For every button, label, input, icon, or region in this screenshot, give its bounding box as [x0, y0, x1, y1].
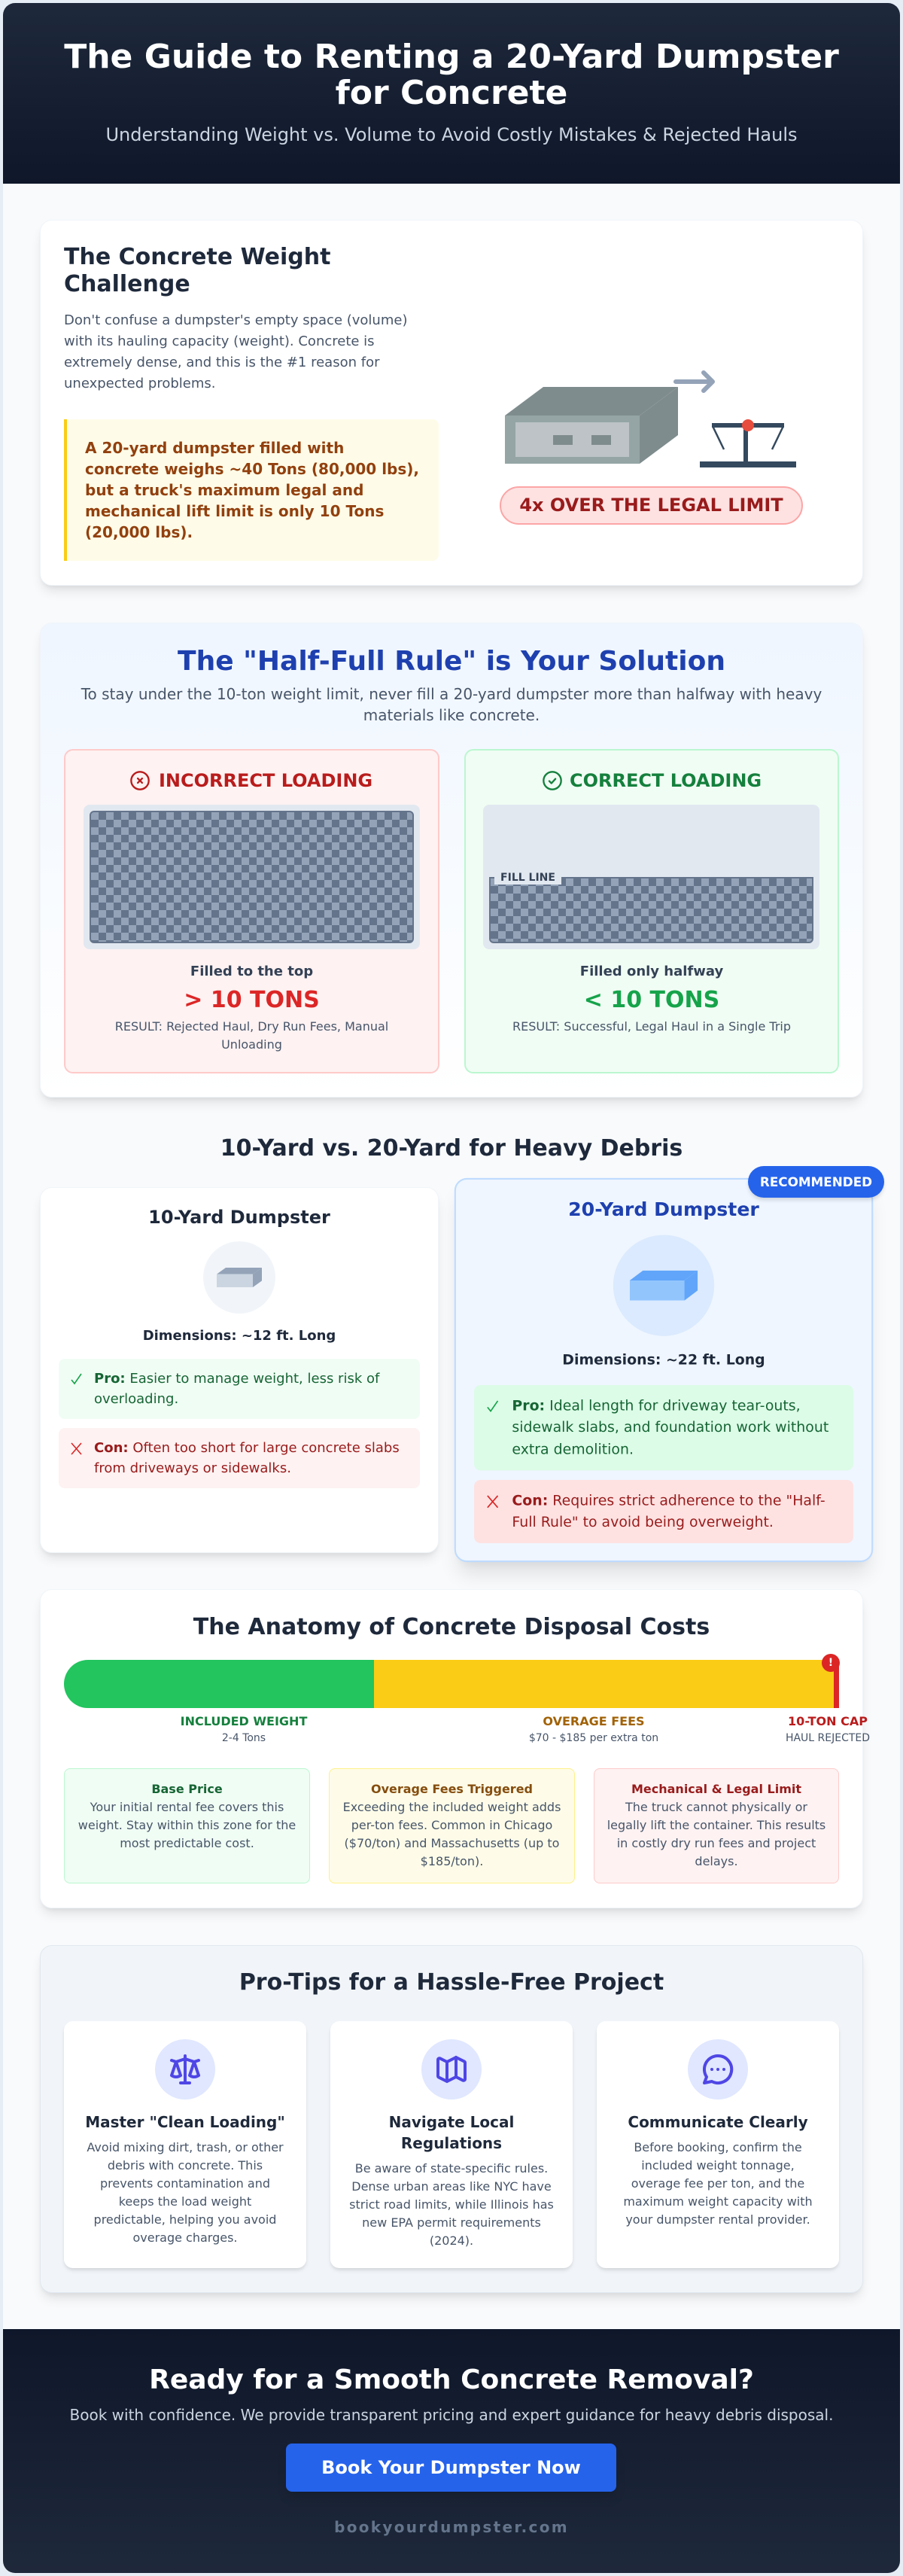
badge: recommended — [748, 1166, 884, 1198]
header banner — [0, 0, 903, 184]
text: concrete explanation: with its hauling capacity (weight). Concrete is — [64, 333, 375, 349]
heading: Communicate Clearly — [628, 2113, 808, 2131]
panel: incorrect loading — [64, 749, 439, 1073]
heading: concrete weight challenge — [64, 244, 330, 297]
text — [87, 2140, 284, 2245]
text: incorrect result: Unloading — [221, 1037, 282, 1052]
card: base price: Your initial rental fee covers this — [90, 1800, 284, 1814]
card: mechanical and legal limit: in costly dry run fees and project — [617, 1836, 816, 1850]
label: included weight — [181, 1714, 307, 1744]
label: 10-ton cap — [786, 1714, 870, 1744]
fill line label: FILL LINE — [500, 872, 555, 884]
pro: overloading. — [94, 1391, 178, 1407]
callout text: but a truck's maximum legal and — [85, 481, 363, 499]
con: Con: Often too short for large concrete slabs — [94, 1439, 400, 1456]
heading: Master "Clean Loading" — [85, 2113, 285, 2131]
heading: pro-tips: Pro-Tips for a Hassle-Free Project — [239, 1969, 664, 1996]
card: base price — [64, 1768, 310, 1883]
text: new EPA permit requirements — [362, 2215, 541, 2230]
heading: call to action: Ready for a Smooth Concrete Removal? — [149, 2364, 754, 2395]
heading: 10-yard: 10-Yard Dumpster — [148, 1207, 330, 1228]
icon: large dumpster — [613, 1235, 714, 1336]
text: website: bookyourdumpster.com — [334, 2518, 569, 2536]
text — [623, 2140, 813, 2227]
text: Avoid mixing dirt, trash, or other — [87, 2140, 284, 2154]
label: included weight: 2-4 Tons — [222, 1732, 266, 1744]
panel: disposal costs — [40, 1589, 863, 1908]
segment: included weight — [64, 1660, 374, 1708]
card: mechanical and legal limit: delays. — [695, 1854, 738, 1868]
callout text: concrete weighs ~40 Tons (80,000 lbs), — [85, 460, 419, 478]
heading: concrete weight challenge: Challenge — [64, 271, 190, 297]
panel: concrete weight challenge — [40, 220, 863, 586]
text: (2024). — [430, 2233, 473, 2248]
card: overage fees triggered: ($70/ton) and Massachusetts (up to — [345, 1836, 559, 1850]
heading — [389, 2113, 514, 2152]
panel: 20-yard dumpster — [455, 1178, 873, 1562]
card: mechanical and legal limit — [594, 1768, 839, 1883]
marker icon: exclamation — [822, 1654, 840, 1672]
pro: sidewalk slabs, and foundation work without — [512, 1419, 829, 1436]
text: concrete explanation: extremely dense, and this is the #1 reason for — [64, 355, 379, 370]
text: included weight tonnage, — [641, 2158, 795, 2173]
text: overage fee per ton, and the — [631, 2176, 804, 2191]
tip: clean loading — [64, 2021, 306, 2268]
text: dimensions: Dimensions: ~22 ft. Long — [562, 1352, 765, 1369]
card: overage fees triggered: Exceeding the included weight adds — [343, 1800, 561, 1814]
heading: disposal costs: The Anatomy of Concrete Disposal Costs — [193, 1614, 710, 1640]
card: overage fees triggered: Overage Fees Triggered — [371, 1782, 533, 1796]
text: Be aware of state-specific rules. — [355, 2161, 548, 2176]
icon: x circle — [130, 771, 150, 790]
text: incorrect result: RESULT: Rejected Haul, Dry Run Fees, Manual — [115, 1019, 388, 1034]
pro: Pro: Ideal length for driveway tear-outs, — [512, 1397, 801, 1414]
label: overage fees: $70 - $185 per extra ton — [529, 1732, 658, 1744]
text: overage charges. — [132, 2230, 238, 2245]
marker: 10-ton cap — [834, 1660, 839, 1708]
text: prevents contamination and — [100, 2176, 270, 2191]
text: call to action: Book with confidence. We provide transparent pricing and expert guidance for heavy debris disposal. — [70, 2406, 833, 2424]
icon: chat bubble — [688, 2039, 748, 2099]
marker icon: exclamation: ! — [829, 1657, 833, 1669]
card: base price: weight. Stay within this zone for the — [78, 1818, 296, 1832]
card: base price: most predictable cost. — [120, 1836, 254, 1850]
label: included weight: INCLUDED WEIGHT — [181, 1714, 307, 1728]
panel: pro-tips — [40, 1945, 863, 2293]
icon: scale — [155, 2039, 215, 2099]
text: correct result: RESULT: Successful, Legal Haul in a Single Trip — [512, 1019, 791, 1034]
title: The Guide to Renting a 20-Yard Dumpster — [64, 38, 839, 76]
panel: 10-yard dumpster — [40, 1187, 439, 1553]
con — [474, 1480, 853, 1543]
text: dimensions: Dimensions: ~12 ft. Long — [143, 1328, 336, 1344]
pro — [474, 1385, 853, 1470]
title: for Concrete — [336, 74, 567, 112]
label: overage fees: OVERAGE FEES — [543, 1714, 645, 1728]
card: overage fees triggered — [329, 1768, 575, 1883]
text: keeps the load weight — [119, 2194, 251, 2209]
subtitle: Understanding Weight vs. Volume to Avoid Costly Mistakes & Rejected Hauls — [105, 124, 798, 145]
panel: correct loading — [464, 749, 839, 1073]
concrete fill — [90, 811, 414, 943]
text: filled to the top: Filled to the top — [190, 964, 313, 979]
label: 10-ton cap: 10-TON CAP — [788, 1714, 868, 1728]
heading: 20-yard: 20-Yard Dumpster — [568, 1198, 759, 1221]
text: concrete explanation: Don't confuse a dumpster's empty space (volume) — [64, 312, 407, 328]
text: filled only halfway: Filled only halfway — [580, 964, 723, 979]
badge: recommended: RECOMMENDED — [760, 1174, 872, 1189]
badge: 4x over the legal limit: 4x OVER THE LEGAL LIMIT — [519, 495, 783, 516]
text: incorrect result — [115, 1019, 388, 1052]
text: predictable, helping you avoid — [94, 2212, 276, 2227]
illustration: dumpster, arrow and scale — [505, 370, 796, 467]
text: debris with concrete. This — [108, 2158, 263, 2173]
icon: check circle — [543, 771, 562, 790]
card: overage fees triggered: per-ton fees. Common in Chicago — [351, 1818, 552, 1832]
text: half-full explanation: materials like concrete. — [363, 706, 540, 724]
button: book your dumpster — [286, 2444, 616, 2492]
heading: Navigate Local — [389, 2113, 514, 2131]
con: Full Rule" to avoid being overweight. — [512, 1514, 774, 1530]
heading: incorrect loading — [130, 770, 372, 791]
badge: 4x over the legal limit — [500, 486, 803, 525]
label: overage fees — [529, 1714, 658, 1744]
card: base price: Base Price — [151, 1782, 223, 1796]
text: half-full explanation: To stay under the 10-ton weight limit, never fill a 20-yard dumpster more than halfway with heavy — [81, 685, 822, 703]
con: from driveways or sidewalks. — [94, 1460, 291, 1476]
heading: correct loading — [543, 770, 762, 791]
pro: extra demolition. — [512, 1441, 634, 1457]
card: overage fees triggered: $185/ton). — [421, 1854, 483, 1868]
diagram: filled to the top — [84, 805, 420, 949]
text: maximum weight capacity with — [623, 2194, 813, 2209]
icon: map — [421, 2039, 482, 2099]
heading: half-full rule: The "Half-Full Rule" is Your Solution — [178, 646, 725, 677]
callout text: mechanical lift limit is only 10 Tons — [85, 502, 384, 520]
card: mechanical and legal limit: The truck cannot physically or — [625, 1800, 807, 1814]
text: Dense urban areas like NYC have — [351, 2179, 552, 2194]
label: CORRECT LOADING — [570, 770, 762, 791]
text: concrete explanation: unexpected problems. — [64, 376, 215, 391]
panel: half-full rule — [40, 623, 863, 1098]
heading: Regulations — [401, 2134, 502, 2152]
text: your dumpster rental provider. — [625, 2212, 810, 2227]
pro: Pro: Easier to manage weight, less risk of — [94, 1370, 379, 1387]
text: strict road limits, while Illinois has — [349, 2197, 554, 2212]
card: mechanical and legal limit: legally lift the container. This results — [607, 1818, 825, 1832]
title — [64, 38, 839, 112]
callout text: A 20-yard dumpster filled with — [85, 439, 344, 457]
text: half-full explanation — [81, 685, 822, 724]
text — [349, 2161, 554, 2248]
segment: overage fees — [374, 1660, 839, 1708]
diagram: filled halfway — [483, 805, 819, 949]
footer banner — [0, 2329, 903, 2576]
label: INCORRECT LOADING — [159, 770, 372, 791]
label: 10-ton cap: HAUL REJECTED — [786, 1732, 870, 1744]
chart: cost bar — [64, 1654, 840, 1708]
text: concrete explanation — [64, 312, 407, 391]
con — [59, 1428, 420, 1488]
tip: local regulations — [330, 2021, 573, 2268]
text: Before booking, confirm the — [634, 2140, 802, 2154]
figure: over 10 tons: > 10 TONS — [184, 987, 320, 1013]
heading: concrete weight challenge: The Concrete Weight — [64, 244, 330, 270]
callout text: (20,000 lbs). — [85, 523, 193, 541]
con: Con: Requires strict adherence to the "Half- — [512, 1492, 825, 1509]
tip: communicate clearly — [597, 2021, 839, 2268]
icon: small dumpster — [203, 1241, 275, 1314]
card: mechanical and legal limit: Mechanical & Legal Limit — [631, 1782, 801, 1796]
figure: under 10 tons: < 10 TONS — [584, 987, 719, 1013]
concrete fill — [489, 877, 813, 943]
button: book your dumpster: Book Your Dumpster Now — [321, 2457, 581, 2478]
callout text — [85, 439, 419, 541]
callout: 40 tons versus 10 tons — [64, 419, 439, 561]
pro — [59, 1359, 420, 1419]
heading: comparison: 10-Yard vs. 20-Yard for Heavy Debris — [220, 1135, 683, 1162]
